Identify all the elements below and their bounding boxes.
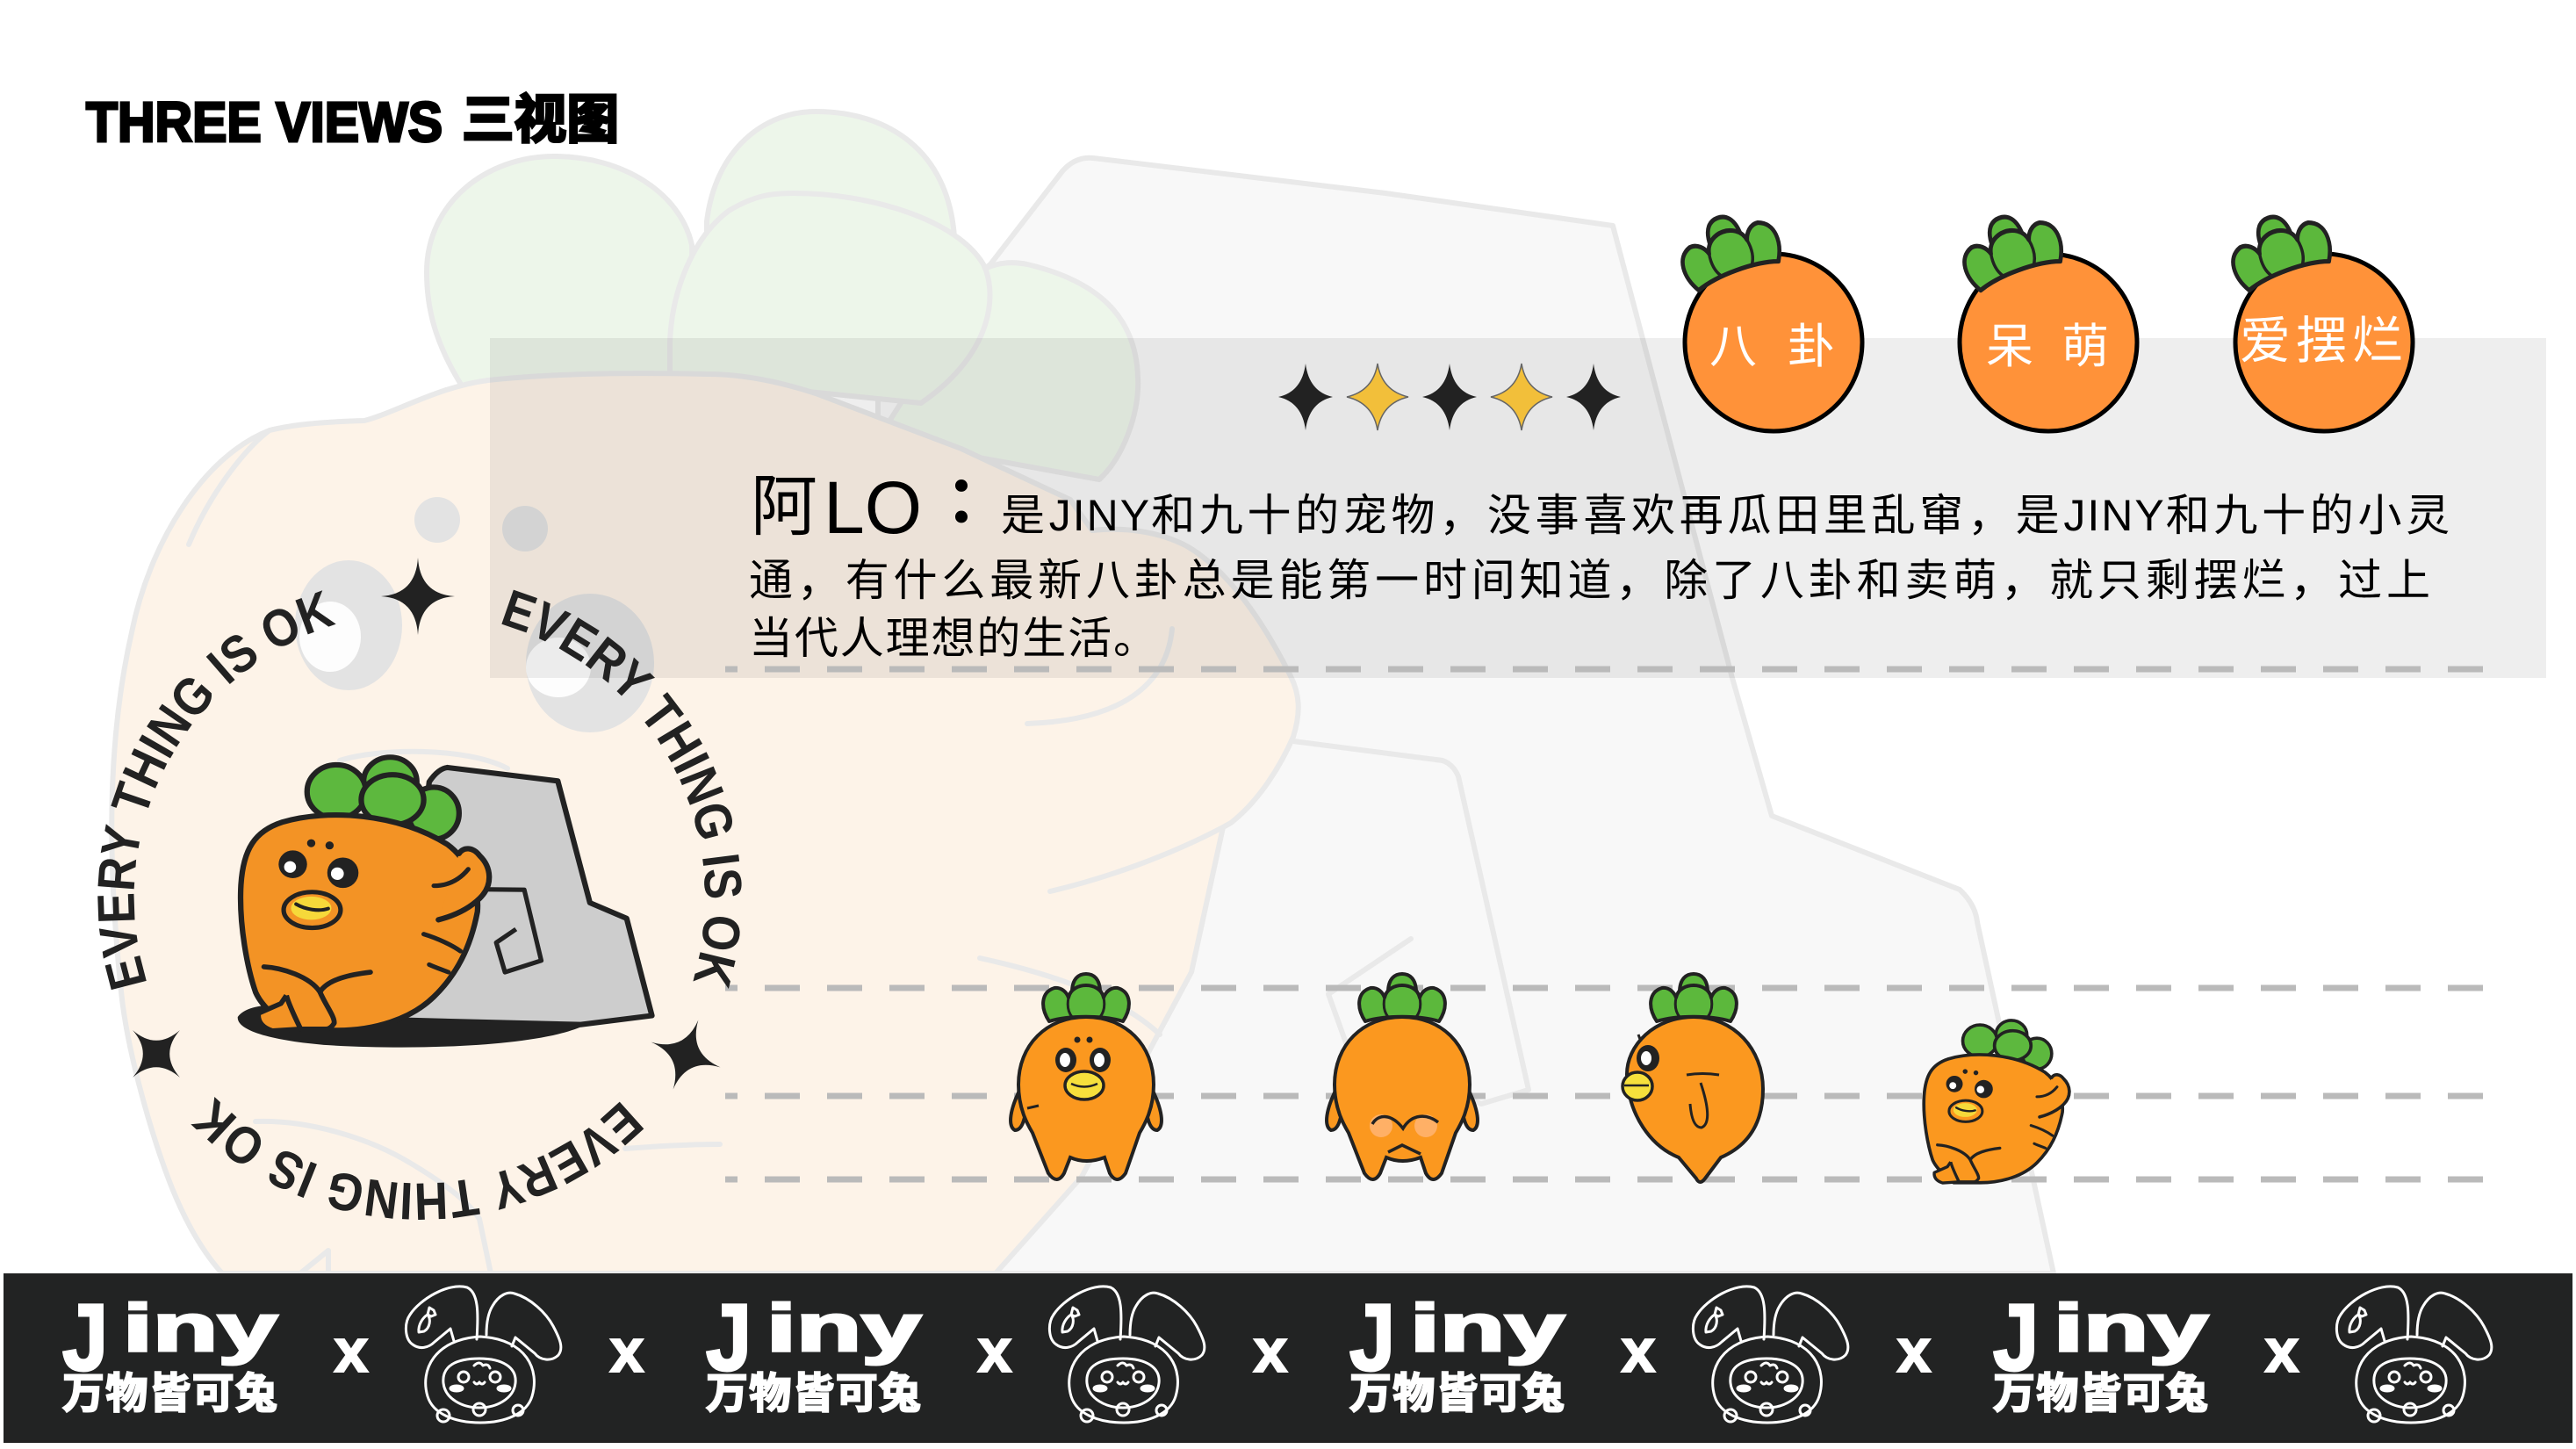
logo group 1: J [62, 1284, 108, 1390]
carrot leaning on rock [238, 757, 652, 1048]
multiplication marks: x [1622, 1316, 1656, 1385]
icon: rabbit 3 [1693, 1287, 1848, 1423]
multiplication marks: x [1897, 1316, 1932, 1385]
logo group 2: J [706, 1284, 752, 1390]
logo group 1: iny [123, 1291, 277, 1366]
background leaves [427, 112, 1138, 479]
logo group 2 [706, 1284, 921, 1417]
logo group 1: 万物皆可兔 [62, 1371, 277, 1417]
title: 三视图 [462, 90, 619, 149]
background carrot inner lines [189, 430, 1223, 1273]
view: three-quarter sitting [1924, 1020, 2069, 1183]
circular slogan text: EVERY THING IS OK [97, 590, 336, 991]
circular slogan text: EVERY THING IS OK [501, 590, 742, 989]
multiplication marks: x [2265, 1316, 2299, 1385]
dashed guide lines [725, 669, 2488, 1179]
view: side [1623, 974, 1763, 1182]
multiplication marks: x [610, 1316, 644, 1385]
name colon: ： [929, 451, 994, 544]
badge: 呆萌 [1953, 201, 2137, 431]
multiplication marks [335, 1316, 2299, 1385]
background rock [878, 158, 2054, 1273]
background rock swirl [1293, 741, 1529, 1104]
icon: sparkle right [638, 1007, 733, 1102]
logo group 2: iny [766, 1291, 921, 1366]
logo group 3: 万物皆可兔 [1349, 1371, 1565, 1417]
logo group 4: J [1993, 1284, 2039, 1390]
logo group 3: J [1349, 1284, 1395, 1390]
multiplication marks: x [978, 1316, 1012, 1385]
view: back [1327, 974, 1478, 1179]
grey description band [490, 338, 2546, 678]
logo group 3: iny [1410, 1291, 1565, 1366]
badge: 呆萌: 呆萌 [1986, 321, 2109, 373]
logo group 2: 万物皆可兔 [706, 1371, 921, 1417]
logo group 3 [1349, 1284, 1565, 1417]
name heading: LO [824, 466, 922, 549]
badge: 爱摆烂: 爱摆烂 [2240, 313, 2403, 370]
badge: 爱摆烂 [2221, 201, 2413, 431]
description text [749, 451, 2454, 663]
logo group 4 [1993, 1284, 2208, 1417]
emblem: circular text with carrot and rock [97, 558, 742, 1220]
icon: rabbit 2 [1049, 1287, 1205, 1423]
name heading: 阿 [751, 470, 817, 544]
line 3: 当代人理想的生活。 [749, 614, 1157, 663]
icon: rabbit 1 [406, 1287, 561, 1423]
background eyes [295, 497, 654, 732]
title: THREE VIEWS [86, 90, 443, 154]
logo group 4: 万物皆可兔 [1993, 1371, 2208, 1417]
circular slogan text: EVERY THING IS OK [191, 1097, 644, 1220]
footer band [4, 1273, 2572, 1443]
logo group 1 [62, 1284, 277, 1417]
badge: 八卦: 八卦 [1709, 321, 1835, 373]
logo group 4: iny [2054, 1291, 2208, 1366]
icon: rabbit 4 [2336, 1287, 2492, 1423]
icon: sparkle top [381, 558, 455, 635]
background carrot body [112, 373, 1299, 1273]
icon: sparkle left [109, 1006, 204, 1101]
line 2: 通，有什么最新八卦总是能第一时间知道，除了八卦和卖萌，就只剩摆烂，过上 [749, 556, 2430, 605]
background: faded carrot and rock illustration [112, 112, 2054, 1273]
badge: 八卦 [1671, 201, 1862, 431]
multiplication marks: x [335, 1316, 369, 1385]
multiplication marks: x [1254, 1316, 1288, 1385]
sparkle row [1278, 364, 1621, 430]
line 1: 是JINY和九十的宠物，没事喜欢再瓜田里乱窜，是JINY和九十的小灵 [1001, 491, 2454, 540]
circular slogan text [97, 590, 742, 1220]
background beak arc [340, 752, 507, 768]
view: front [1011, 974, 1162, 1179]
